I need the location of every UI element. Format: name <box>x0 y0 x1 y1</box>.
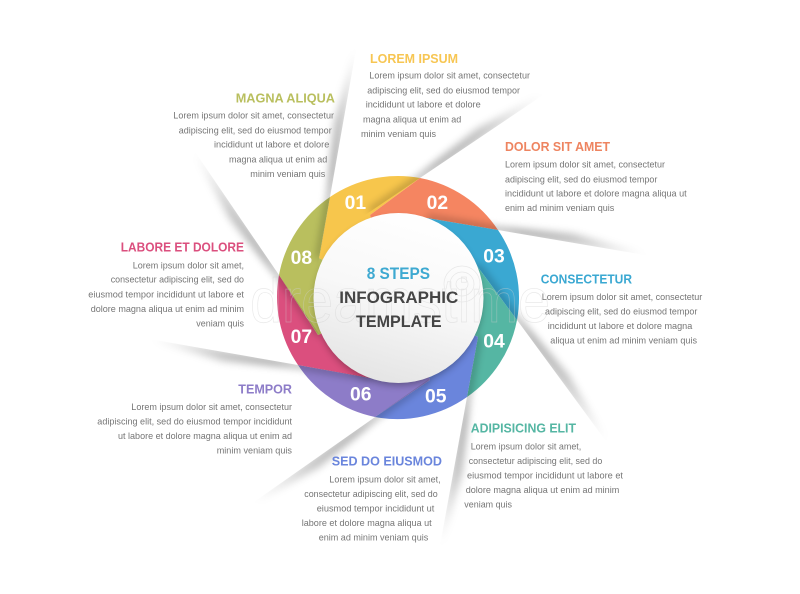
step numbers: 07 <box>291 327 312 348</box>
ring of eight segments <box>277 176 519 419</box>
text block: Magna Aliqua: MAGNA ALIQUA <box>236 91 336 106</box>
segment 03 <box>398 218 519 320</box>
text block: Dolor Sit Amet: enim ad minim veniam quis <box>505 203 615 214</box>
text block: Tempor: Lorem ipsum dolor sit amet, consectetur <box>131 402 292 413</box>
blade between 02 and 03 <box>424 212 626 252</box>
step numbers: 05 <box>425 386 447 407</box>
text block: Adipisicing Elit: veniam quis <box>464 500 512 510</box>
text block: Sed Do Eiusmod: consectetur adipiscing elit, sed do <box>304 489 438 500</box>
text block: Labore Et Dolore: eiusmod tempor incididunt ut labore et <box>88 289 244 300</box>
text block: Magna Aliqua: Lorem ipsum dolor sit amet, consectetur <box>173 111 334 122</box>
text block: Lorem Ipsum: Lorem ipsum dolor sit amet, consectetur <box>369 71 530 82</box>
step numbers: 01 <box>345 193 367 214</box>
centre disc <box>314 213 484 383</box>
text block: Dolor Sit Amet <box>505 139 687 214</box>
text block: Sed Do Eiusmod <box>302 454 442 544</box>
watermark: dreamstime <box>250 267 550 336</box>
blade between 06 and 07 <box>172 343 371 384</box>
text block: Adipisicing Elit: Lorem ipsum dolor sit amet, <box>471 441 581 452</box>
text block: Adipisicing Elit: ADIPISICING ELIT <box>471 421 576 436</box>
text block: Lorem Ipsum: incididunt ut labore et dolore <box>366 100 481 111</box>
segment 01 <box>319 176 420 298</box>
text block: Consectetur <box>541 272 702 346</box>
text block: Lorem Ipsum <box>361 51 530 140</box>
text block: Labore Et Dolore: Lorem ipsum dolor sit amet, <box>133 260 244 271</box>
step numbers: 03 <box>483 247 505 268</box>
text block: Sed Do Eiusmod: Lorem ipsum dolor sit amet, <box>329 475 441 486</box>
blade between 03 and 04 <box>476 263 595 424</box>
text block: Sed Do Eiusmod: labore et dolore magna aliqua ut <box>302 518 432 529</box>
text block: Tempor <box>97 381 293 456</box>
text block: Magna Aliqua <box>173 91 336 180</box>
segment 08 <box>279 197 398 335</box>
segment 07 <box>277 275 398 378</box>
text block: Labore Et Dolore: LABORE ET DOLORE <box>121 240 244 255</box>
segment 02 <box>370 178 498 298</box>
text block: Lorem Ipsum: magna aliqua ut enim ad <box>363 114 461 125</box>
step numbers: 04 <box>483 332 505 353</box>
text block: Adipisicing Elit: eiusmod tempor incididunt ut labore et <box>467 470 623 482</box>
text block: Tempor: TEMPOR <box>238 381 293 396</box>
centre disc shadow <box>316 219 482 385</box>
centre title <box>339 264 458 331</box>
text block: Lorem Ipsum: LOREM IPSUM <box>370 51 458 66</box>
step numbers: 02 <box>427 193 448 214</box>
text block: Adipisicing Elit: dolore magna aliqua ut enim ad minim <box>466 485 619 496</box>
text block: Consectetur: CONSECTETUR <box>541 272 633 287</box>
text block: Magna Aliqua: adipiscing elit, sed do eiusmod tempor <box>179 125 332 136</box>
blade between 07 and 08 <box>205 169 320 338</box>
text block: Magna Aliqua: magna aliqua ut enim ad <box>229 154 327 165</box>
step numbers: 06 <box>350 385 372 406</box>
text block: Sed Do Eiusmod: eiusmod tempor incididunt ut <box>317 504 435 514</box>
text block: Consectetur: Lorem ipsum dolor sit amet, consectetur <box>542 292 702 303</box>
text block: Dolor Sit Amet: incididunt ut labore et dolore magna aliqua ut <box>505 189 687 200</box>
blade between 01 and 02 <box>366 105 526 213</box>
text block: Dolor Sit Amet: DOLOR SIT AMET <box>505 139 610 154</box>
text block: Sed Do Eiusmod: enim ad minim veniam quis <box>319 532 429 544</box>
text block: Labore Et Dolore: veniam quis <box>196 318 244 330</box>
text block: Labore Et Dolore: consectetur adipiscing elit, sed do <box>111 275 244 286</box>
text block: Lorem Ipsum: minim veniam quis <box>361 129 436 140</box>
text block: Sed Do Eiusmod: SED DO EIUSMOD <box>332 454 442 469</box>
text block: Consectetur: adipiscing elit, sed do eiusmod tempor <box>545 306 697 318</box>
text block: Magna Aliqua: minim veniam quis <box>250 169 326 180</box>
shadow blades <box>172 70 626 524</box>
text block: Consectetur: incididunt ut labore et dolore magna <box>548 321 693 332</box>
step numbers <box>291 193 505 407</box>
text block: Consectetur: aliqua ut enim ad minim veniam quis <box>550 336 697 346</box>
text block: Adipisicing Elit <box>464 421 623 510</box>
blade between 08 and 01 <box>314 70 352 260</box>
segment 04 <box>398 266 517 397</box>
text block: Dolor Sit Amet: adipiscing elit, sed do eiusmod tempor <box>505 174 657 185</box>
text block: Labore Et Dolore <box>88 240 244 330</box>
segment 06 <box>298 298 430 417</box>
text block: Tempor: adipiscing elit, sed do eiusmod tempor incididunt <box>97 416 292 428</box>
text block: Adipisicing Elit: consectetur adipiscing elit, sed do <box>469 456 602 467</box>
text block: Dolor Sit Amet: Lorem ipsum dolor sit amet, consectetur <box>505 160 665 171</box>
blade between 04 and 05 <box>444 336 484 524</box>
centre title: TEMPLATE <box>356 312 442 331</box>
centre title: 8 STEPS <box>367 264 430 283</box>
step numbers: 08 <box>291 248 312 269</box>
blade between 05 and 06 <box>271 378 432 492</box>
text block: Tempor: ut labore et dolore magna aliqua ut enim ad <box>118 431 292 442</box>
text block: Magna Aliqua: incididunt ut labore et dolore <box>214 140 329 151</box>
text block: Lorem Ipsum: adipiscing elit, sed do eiusmod tempor <box>367 85 520 96</box>
text block: Labore Et Dolore: dolore magna aliqua ut enim ad minim <box>91 304 244 315</box>
centre title: INFOGRAPHIC <box>339 288 458 307</box>
segment 05 <box>375 298 478 419</box>
text block: Tempor: minim veniam quis <box>217 446 292 456</box>
